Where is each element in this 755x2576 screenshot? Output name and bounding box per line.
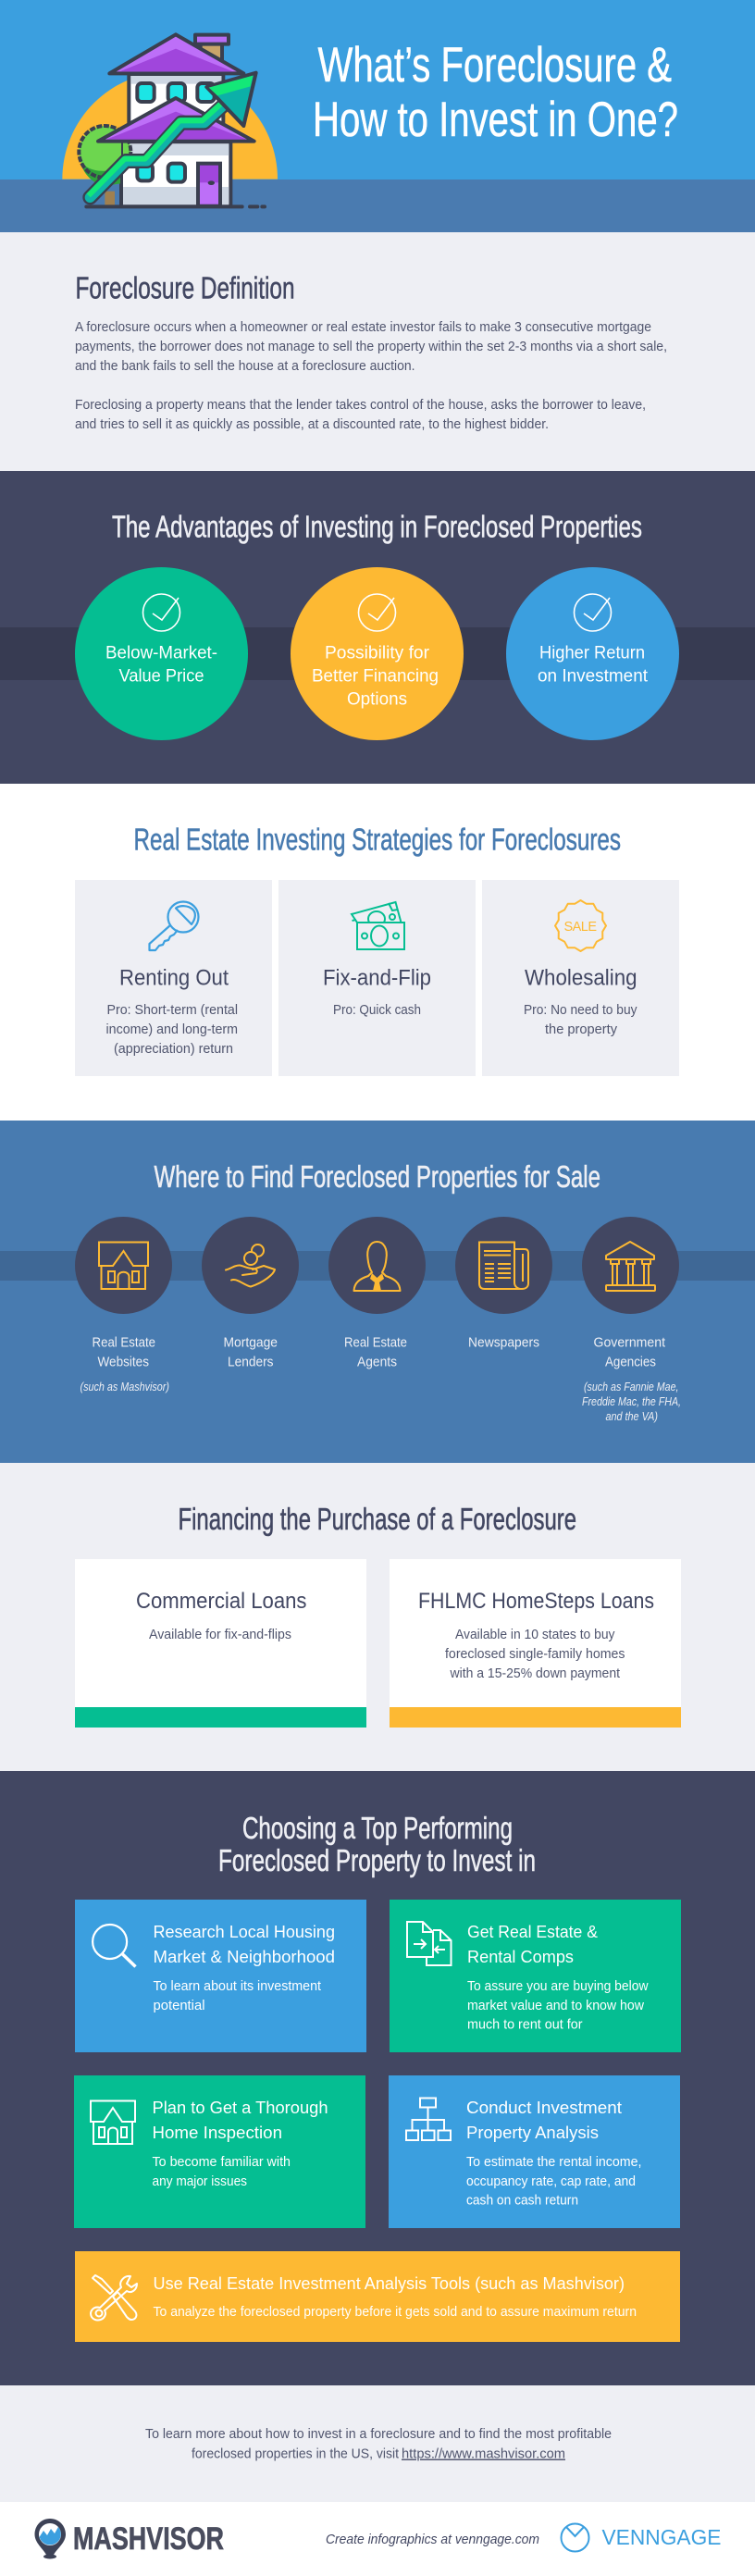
card: FHLMC HomeSteps loans: FHLMC HomeSteps Loans: [418, 1589, 654, 1614]
panel: closing note: [0, 2385, 755, 2502]
icon: org chart: [406, 2099, 451, 2140]
panel: advantages: [0, 471, 755, 784]
source: government agencies: and the VA): [605, 1410, 658, 1423]
source: real estate websites: (such as Mashvisor): [80, 1381, 169, 1393]
card: analysis tools: Use Real Estate Investment Analysis Tools (such as Mashvisor): [154, 2273, 625, 2293]
heading: Foreclosed Property to Invest in: [218, 1843, 536, 1877]
text block: definition: A foreclosure occurs when a homeowner or real estate investor fails to make 3 consecutive mortgage: [75, 319, 651, 335]
source: real estate agents: [328, 1217, 426, 1369]
card: commercial loans: [75, 1559, 366, 1728]
advantage: better financing options: [291, 567, 464, 740]
card: inspection: [74, 2075, 365, 2228]
icon: sale badge: SALE: [564, 920, 597, 935]
source: newspapers: [455, 1217, 552, 1351]
icon: money: [352, 902, 404, 949]
card: comps: much to rent out for: [467, 2017, 583, 2032]
source: government agencies: (such as Fannie Mae,: [584, 1381, 679, 1393]
icon: tools: [91, 2275, 137, 2320]
logo: mashvisor: [35, 2519, 224, 2559]
card: renting out: [75, 880, 272, 1076]
icon: documents: [407, 1922, 452, 1965]
card: commercial loans: Commercial Loans: [136, 1589, 307, 1614]
panel: where to find: [0, 1121, 755, 1463]
source: government agencies: [582, 1217, 681, 1423]
card: investment analysis: [389, 2075, 680, 2228]
advantage: below-market-value price: [75, 567, 248, 740]
card: fix-and-flip: [278, 880, 476, 1076]
heading: Choosing a Top Performing: [242, 1811, 513, 1845]
card: research: potential: [154, 1999, 205, 2013]
card: comps: To assure you are buying below: [467, 1979, 649, 1994]
panel: closing note: https://www.mashvisor.com: [402, 2446, 565, 2461]
source: newspapers: Newspapers: [468, 1334, 539, 1351]
text block: definition: [75, 319, 667, 432]
text: income) and long-term: [105, 1022, 238, 1037]
source: government agencies: Government: [594, 1334, 666, 1351]
card: FHLMC HomeSteps loans: [390, 1559, 681, 1728]
text: [105, 1002, 238, 1057]
card: inspection: Plan to Get a Thorough: [152, 2098, 328, 2117]
card: inspection: Home Inspection: [152, 2123, 282, 2142]
card: comps: Get Real Estate &: [467, 1922, 599, 1941]
text block: definition: and tries to sell it as quickly as possible, at a discounted rate, to the highest bidder.: [75, 416, 549, 432]
text: Pro: No need to buy: [524, 1002, 637, 1018]
panel: foreclosure definition: [0, 232, 755, 471]
source: real estate websites: [75, 1217, 172, 1393]
panel: financing: [0, 1463, 755, 1771]
card: research: Research Local Housing: [154, 1922, 335, 1941]
advantage: higher return: on Investment: [538, 666, 649, 687]
heading: Fix-and-Flip: [323, 966, 431, 991]
card: research: To learn about its investment: [154, 1979, 321, 1994]
icon: magnifier: [93, 1925, 135, 1967]
logo: venngage: [561, 2524, 722, 2552]
heading: Where to Find Foreclosed Properties for Sale: [154, 1159, 600, 1194]
logo: venngage: VENNGAGE: [601, 2525, 722, 2549]
card: analysis tools: [75, 2251, 680, 2342]
card: investment analysis: To estimate the rental income,: [466, 2155, 642, 2170]
card: FHLMC HomeSteps loans: foreclosed single-family homes: [445, 1646, 625, 1662]
panel: header: [0, 0, 755, 232]
advantage: better financing options: Better Financing: [312, 666, 439, 687]
text block: definition: payments, the borrower does not manage to sell the property within the set 2-3 months via a short sale,: [75, 339, 667, 354]
title: [313, 38, 678, 147]
card: research: [75, 1900, 366, 2052]
text: Pro: Quick cash: [333, 1002, 421, 1018]
heading: Financing the Purchase of a Foreclosure: [178, 1502, 576, 1536]
source: real estate websites: Real Estate: [93, 1334, 155, 1351]
source: mortgage lenders: Mortgage: [224, 1334, 278, 1351]
advantage: below-market-value price: Value Price: [118, 666, 204, 687]
panel: choosing a property: [0, 1771, 755, 2385]
card: comps: [390, 1900, 681, 2052]
source: mortgage lenders: Lenders: [228, 1355, 274, 1369]
panel: footer: [0, 2502, 755, 2576]
icon: house with rising arrow: [62, 34, 278, 206]
card: FHLMC HomeSteps loans: with a 15-25% down payment: [450, 1666, 621, 1681]
advantage: higher return: Higher Return: [539, 642, 645, 663]
icon: sale badge: [555, 900, 606, 951]
advantage: below-market-value price: Below-Market-: [105, 642, 217, 663]
source: real estate agents: Agents: [357, 1355, 397, 1369]
card: analysis tools: To analyze the foreclosed property before it gets sold and to assure maximum return: [154, 2305, 637, 2320]
card: commercial loans: Available for fix-and-flips: [149, 1627, 291, 1642]
card: investment analysis: occupancy rate, cap rate, and: [466, 2174, 636, 2189]
panel: closing note: foreclosed properties in the US, visit: [192, 2446, 399, 2461]
heading: Wholesaling: [525, 966, 637, 991]
text: Pro: Short-term (rental: [107, 1002, 238, 1018]
card: investment analysis: cash on cash return: [466, 2193, 578, 2208]
advantage: higher return: [506, 567, 679, 740]
advantage: better financing options: Options: [347, 688, 407, 709]
card: wholesaling: [482, 880, 679, 1076]
card: investment analysis: Conduct Investment: [466, 2098, 622, 2117]
icon: key: [150, 901, 198, 950]
source: government agencies: Agencies: [605, 1355, 656, 1369]
card: comps: Rental Comps: [467, 1947, 574, 1966]
card: inspection: any major issues: [152, 2174, 247, 2189]
card: inspection: To become familiar with: [152, 2155, 291, 2170]
heading: Foreclosure Definition: [76, 271, 294, 305]
card: FHLMC HomeSteps loans: Available in 10 states to buy: [455, 1627, 615, 1642]
panel: strategies: [0, 784, 755, 1121]
card: research: Market & Neighborhood: [154, 1947, 335, 1966]
text: (appreciation) return: [114, 1041, 233, 1057]
logo: mashvisor: MASHVISOR: [73, 2521, 224, 2557]
text: the property: [545, 1022, 617, 1037]
credit line: Create infographics at venngage.com: [326, 2533, 539, 2547]
source: real estate agents: Real Estate: [344, 1334, 407, 1351]
heading: Renting Out: [119, 966, 229, 991]
text: [524, 1002, 637, 1037]
card: investment analysis: Property Analysis: [466, 2123, 599, 2142]
source: government agencies: Freddie Mac, the FHA,: [582, 1395, 681, 1408]
text block: definition: Foreclosing a property means that the lender takes control of the house, asks the borrower to leave,: [75, 397, 646, 413]
panel: closing note: To learn more about how to invest in a foreclosure and to find the most profitable: [145, 2427, 612, 2442]
advantage: better financing options: Possibility for: [325, 642, 429, 663]
text block: definition: and the bank fails to sell the house at a foreclosure auction.: [75, 358, 415, 374]
source: mortgage lenders: [202, 1217, 299, 1369]
card: comps: market value and to know how: [467, 1999, 645, 2013]
heading: [218, 1811, 536, 1877]
source: real estate websites: Websites: [98, 1355, 149, 1369]
icon: house: [91, 2100, 135, 2144]
